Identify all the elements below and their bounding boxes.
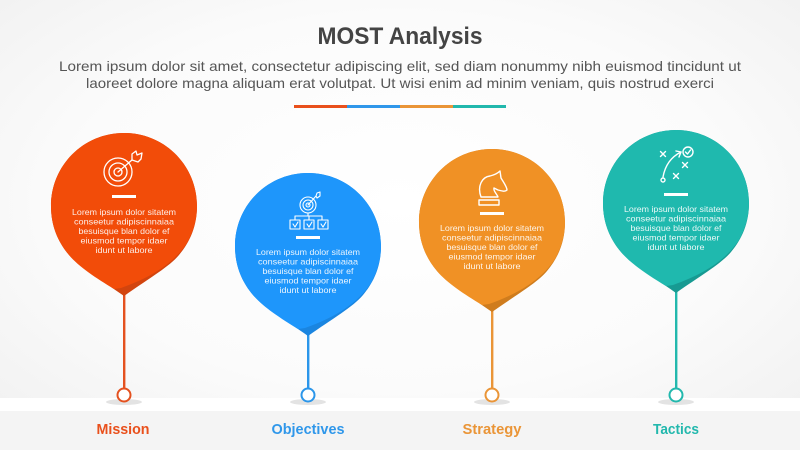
tactics text: conseetur adipiscinnaiaa bbox=[626, 214, 726, 224]
intro text: Lorem ipsum dolor sit amet, consectetur adipiscing elit, sed diam nonummy nibh euismod tincidunt ut bbox=[59, 58, 741, 74]
label: tactics: Tactics bbox=[653, 421, 699, 438]
mission text: besuisque blan dolor ef bbox=[78, 226, 170, 236]
divider bbox=[112, 195, 136, 198]
intro text bbox=[59, 58, 741, 91]
objectives text: besuisque blan dolor ef bbox=[262, 266, 354, 276]
title divider bbox=[294, 105, 506, 108]
label: mission: Mission bbox=[96, 421, 150, 438]
divider bbox=[480, 212, 504, 215]
tactics text bbox=[624, 204, 728, 252]
label: objectives: Objectives bbox=[272, 421, 344, 438]
strategy text: idunt ut labore bbox=[464, 261, 521, 271]
icon: target hierarchy bbox=[290, 192, 328, 229]
icon: target with arrow bbox=[104, 151, 142, 186]
tactics stem and marker bbox=[658, 291, 694, 405]
objectives text bbox=[256, 247, 360, 295]
strategy stem and marker bbox=[474, 311, 510, 405]
strategy text: besuisque blan dolor ef bbox=[446, 242, 538, 252]
mission text: eiusmod tempor idaer bbox=[80, 236, 168, 246]
label: strategy: Strategy bbox=[462, 421, 522, 438]
strategy text: Lorem ipsum dolor sitatem bbox=[440, 223, 544, 233]
mission text: Lorem ipsum dolor sitatem bbox=[72, 207, 176, 217]
strategy balloon bbox=[419, 149, 565, 312]
mission text bbox=[72, 207, 176, 255]
tactics text: besuisque blan dolor ef bbox=[630, 223, 722, 233]
intro text: laoreet dolore magna aliquam erat volutpat. Ut wisi enim ad minim veniam, quis nostrud exerci bbox=[86, 75, 714, 91]
strategy text: eiusmod tempor idaer bbox=[448, 252, 536, 262]
objectives stem and marker bbox=[290, 333, 326, 405]
icon: play diagram bbox=[660, 147, 693, 182]
objectives text: Lorem ipsum dolor sitatem bbox=[256, 247, 360, 257]
panel: tactics bbox=[603, 130, 749, 405]
title: MOST Analysis bbox=[318, 23, 482, 50]
tactics text: Lorem ipsum dolor sitatem bbox=[624, 204, 728, 214]
tactics text: eiusmod tempor idaer bbox=[632, 232, 720, 242]
objectives text: idunt ut labore bbox=[280, 285, 337, 295]
divider bbox=[664, 193, 688, 196]
panel: strategy bbox=[419, 149, 565, 405]
strategy text: conseetur adipiscinnaiaa bbox=[442, 232, 542, 242]
tactics text: idunt ut labore bbox=[648, 242, 705, 252]
divider bbox=[296, 236, 320, 239]
objectives text: eiusmod tempor idaer bbox=[264, 276, 352, 286]
objectives balloon bbox=[235, 173, 381, 336]
panel: mission bbox=[51, 133, 197, 405]
panel: objectives bbox=[235, 173, 381, 405]
strategy text bbox=[440, 223, 544, 271]
mission text: conseetur adipiscinnaiaa bbox=[74, 216, 174, 226]
mission stem and marker bbox=[106, 293, 142, 405]
icon: chess knight bbox=[479, 171, 507, 205]
tactics balloon bbox=[603, 130, 749, 293]
mission balloon bbox=[51, 133, 197, 296]
objectives text: conseetur adipiscinnaiaa bbox=[258, 256, 358, 266]
mission text: idunt ut labore bbox=[96, 245, 153, 255]
